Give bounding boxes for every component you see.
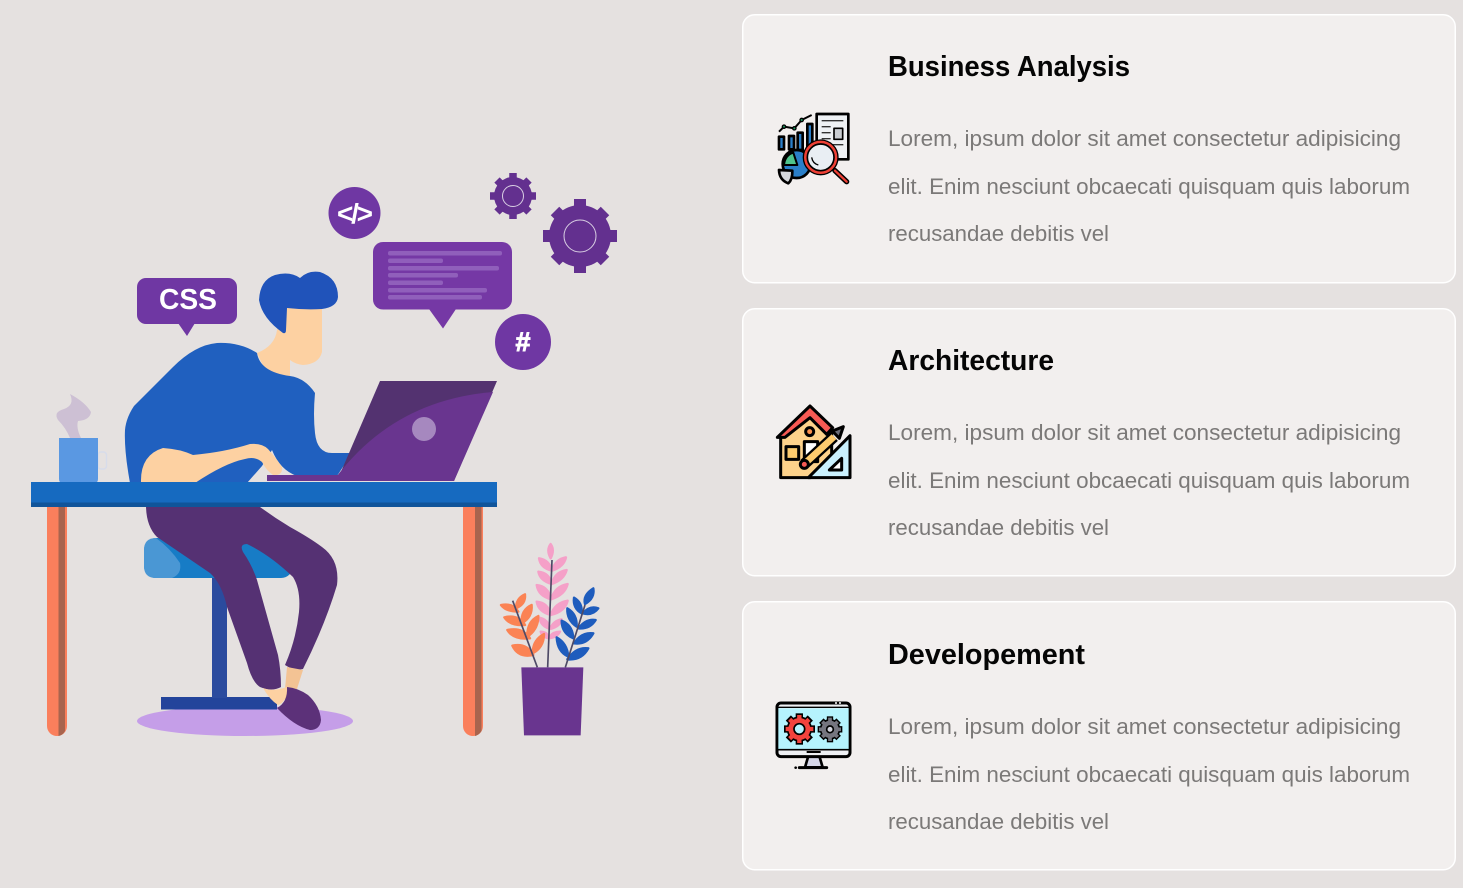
illustration: developer working at desk [31,173,617,736]
card background [743,602,1455,870]
CSS speech bubble [137,278,237,336]
small gear [490,173,536,219]
ankles [263,667,303,705]
large gear [543,199,617,273]
code icon circle: </> [337,198,373,229]
description [888,126,1410,246]
potted plant [501,544,598,735]
description: Lorem, ipsum dolor sit amet consectetur adipisicing [888,420,1401,445]
description: elit. Enim nesciunt obcaecati quisquam quis laborum [888,762,1410,787]
message speech bubble [373,242,512,328]
table leg left [47,505,67,736]
table leg right [463,505,483,736]
description [888,420,1410,540]
hash icon circle [495,314,551,370]
description: elit. Enim nesciunt obcaecati quisquam quis laborum [888,468,1410,493]
icon: house with pencil and set square [777,406,850,478]
description: recusandae debitis vel [888,221,1109,246]
CSS speech bubble: CSS [159,284,217,316]
torso [125,343,352,483]
icon: analytics with magnifier [779,114,848,183]
title: Business Analysis [888,51,1130,83]
legs and trousers [146,505,337,690]
hash icon circle: # [515,327,531,357]
card background [743,15,1455,283]
description: recusandae debitis vel [888,809,1109,834]
laptop [267,381,497,481]
description: recusandae debitis vel [888,515,1109,540]
description [888,714,1410,834]
table top [31,482,497,507]
panel: developement [743,602,1455,870]
title: Architecture [888,345,1054,377]
title: Developement [888,639,1085,671]
description: Lorem, ipsum dolor sit amet consectetur adipisicing [888,714,1401,739]
coffee mug [56,394,106,483]
panel: architecture [743,309,1455,576]
floor shadow ellipse [137,706,353,736]
panel: business analysis [743,15,1455,283]
description: elit. Enim nesciunt obcaecati quisquam quis laborum [888,174,1410,199]
chair [144,538,293,710]
red gear [784,713,815,745]
card background [743,309,1455,576]
forearm [141,444,282,483]
neck and face [257,305,322,377]
description: Lorem, ipsum dolor sit amet consectetur adipisicing [888,126,1401,151]
icon: monitor with gears [777,702,850,769]
grey gear [818,716,842,742]
shoe [277,687,321,730]
hair [259,272,338,333]
code icon circle [328,187,380,239]
